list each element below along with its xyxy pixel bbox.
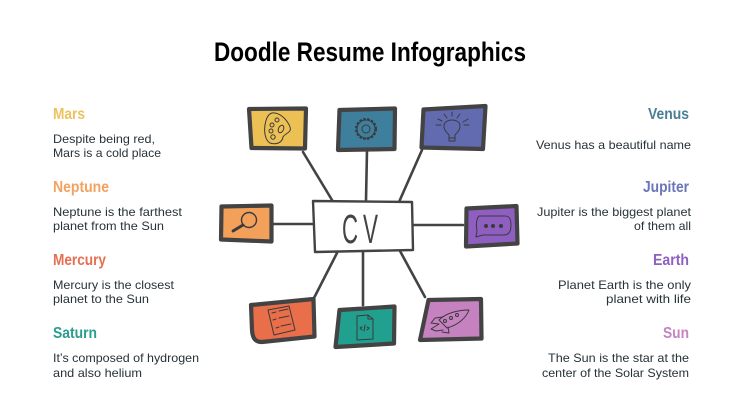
icon card: code file — [336, 306, 394, 347]
text block: Saturn — [53, 325, 199, 380]
text block: Sun: Sun — [663, 325, 689, 342]
icon card: palette — [249, 108, 306, 148]
text block: Mars: Despite being red, — [53, 132, 155, 146]
text block: Earth — [558, 252, 691, 306]
text block: Jupiter: Jupiter is the biggest planet — [537, 205, 692, 219]
connector lines — [274, 150, 463, 305]
text block: Earth: Planet Earth is the only — [558, 278, 691, 292]
title: Doodle Resume Infographics — [214, 37, 526, 67]
icon card: speech bubble — [466, 206, 518, 246]
text block: Mercury: Mercury is the closest — [53, 278, 175, 292]
CV label: C — [342, 206, 358, 252]
icon card: checklist — [251, 299, 314, 342]
central CV box — [313, 201, 413, 252]
text block: Earth: Earth — [653, 252, 689, 269]
text block: Neptune: planet from the Sun — [53, 219, 164, 233]
text block: Jupiter: of them all — [634, 219, 691, 233]
icon card: rocket — [420, 299, 482, 340]
text block: Earth: planet with life — [606, 292, 691, 306]
icon card: magnifying glass — [221, 206, 272, 242]
text block: Mercury: Mercury — [53, 252, 106, 269]
icon card: light bulb — [422, 106, 486, 149]
text block: Jupiter — [537, 179, 692, 233]
text block: Mars: Mars — [53, 106, 85, 123]
text block: Neptune — [53, 179, 183, 233]
CV label: V — [363, 206, 378, 252]
text block: Neptune: Neptune is the farthest — [53, 205, 183, 219]
text block: Sun — [542, 325, 689, 380]
text block: Venus: Venus has a beautiful name — [536, 138, 691, 152]
text block: Mars: Mars is a cold place — [53, 146, 161, 160]
text block: Saturn: Saturn — [53, 325, 97, 342]
text block: Mercury — [53, 252, 175, 306]
icon card: gear — [338, 108, 395, 150]
text block: Venus — [536, 106, 691, 152]
text block: Saturn: and also helium — [53, 366, 142, 380]
text block: Mars — [53, 106, 161, 160]
text block: Jupiter: Jupiter — [643, 179, 689, 196]
text block: Neptune: Neptune — [53, 179, 109, 196]
text block: Mercury: planet to the Sun — [53, 292, 149, 306]
text block: Sun: center of the Solar System — [542, 366, 689, 380]
text block: Venus: Venus — [648, 106, 689, 123]
text block: Saturn: It’s composed of hydrogen — [53, 351, 199, 365]
text block: Sun: The Sun is the star at the — [548, 351, 689, 365]
